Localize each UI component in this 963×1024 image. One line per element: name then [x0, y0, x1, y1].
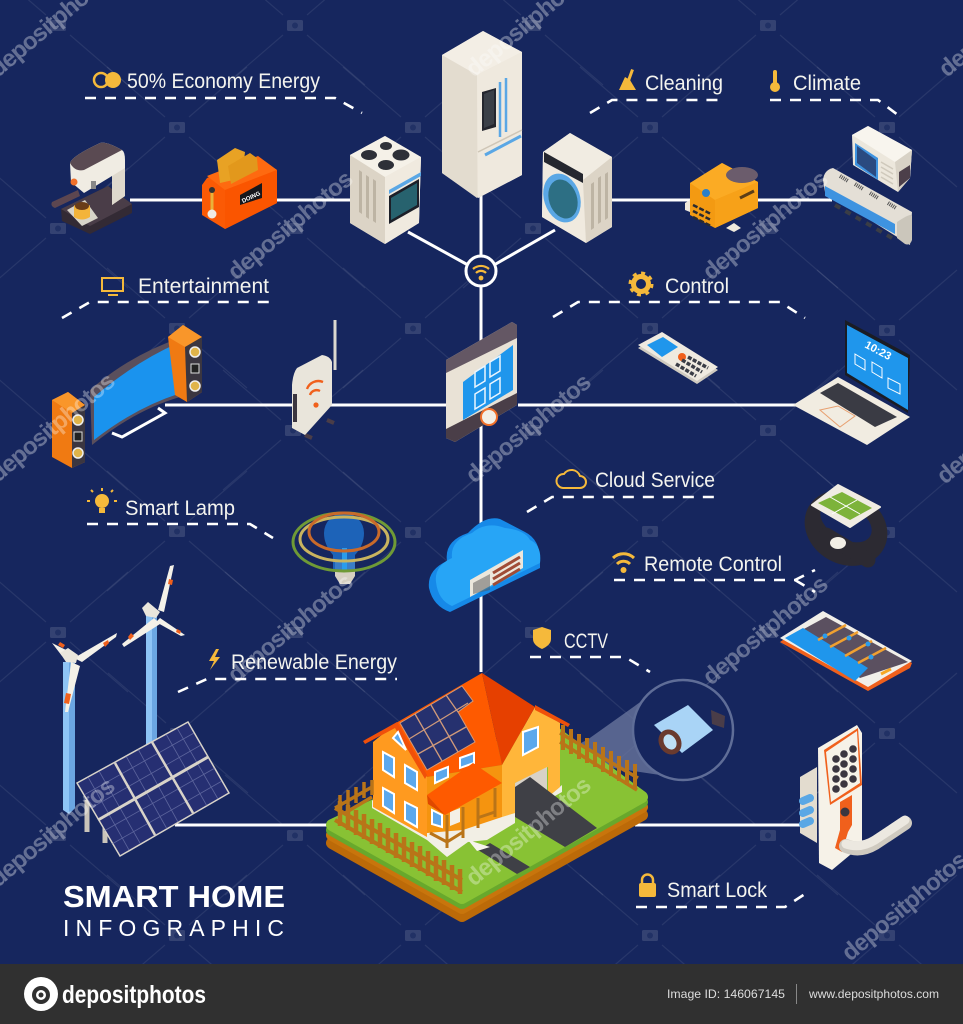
heading: label Control	[553, 273, 805, 318]
icon: tablet hub	[446, 322, 517, 442]
stock watermark: depositphotos	[461, 368, 597, 489]
icon: laptop	[793, 320, 910, 445]
connection lines	[130, 195, 832, 825]
icon: smart watch	[791, 475, 901, 581]
icon: wifi hub node	[466, 256, 496, 286]
heading: label Entertainment	[62, 275, 275, 318]
icon: coins	[94, 72, 121, 88]
icon: cloud outline	[556, 470, 586, 488]
icon: TV	[90, 338, 180, 445]
title	[63, 879, 285, 941]
heading: label Climate: Climate	[793, 72, 861, 95]
icon: indoor AC unit	[823, 168, 912, 245]
heading: label Control: Control	[665, 275, 729, 298]
icon: solar panel	[77, 722, 229, 856]
heading: label Remote Control	[613, 553, 815, 592]
icon: robot vacuum	[685, 163, 758, 232]
icon: outdoor AC unit	[852, 126, 912, 192]
icon: padlock	[639, 874, 656, 897]
icon: wind turbine large	[122, 565, 185, 745]
icon: shield	[533, 627, 551, 649]
stock watermark: depositphotos	[461, 771, 597, 892]
icon: left speaker	[52, 392, 85, 468]
icon: laptop: 10:23	[863, 339, 893, 363]
heading: label Cloud Service	[527, 469, 718, 512]
icon: thermometer	[770, 70, 780, 92]
icon: gear	[630, 273, 652, 295]
title: SMART HOME	[63, 879, 285, 914]
icon: smart lamp with rings	[293, 513, 395, 584]
stock watermark: depositphotos	[698, 570, 834, 691]
icon: router	[292, 320, 335, 438]
front fence	[335, 801, 462, 894]
house foundation and walls	[372, 707, 562, 857]
icon: remote control	[638, 327, 718, 384]
heading: label Cleaning: Cleaning	[645, 72, 723, 95]
icon: toaster	[202, 148, 277, 229]
heading: label Smart Lamp: Smart Lamp	[125, 497, 235, 520]
heading: label Cloud Service: Cloud Service	[595, 469, 715, 492]
footer bar	[0, 964, 963, 1024]
icon: cloud with server	[429, 518, 540, 612]
heading: label Smart Lock: Smart Lock	[667, 879, 767, 902]
icon: wifi	[613, 554, 634, 573]
icon: oven	[350, 136, 421, 244]
footer bar: www.depositphotos.com	[808, 987, 939, 1001]
side fence	[335, 780, 372, 813]
icon: coffee machine	[51, 143, 132, 234]
roof	[363, 673, 570, 779]
stock watermark: depositphotos	[223, 165, 359, 286]
heading: label Renewable Energy	[178, 649, 397, 692]
back fence	[560, 725, 638, 790]
heading: label 50% Economy Energy	[85, 70, 362, 113]
heading: label Smart Lamp	[87, 488, 273, 538]
icon: smartphone	[780, 611, 912, 691]
icon: monitor	[102, 278, 123, 295]
heading: label CCTV	[530, 627, 650, 672]
icon: brush	[619, 69, 636, 90]
icon: house on lawn	[332, 673, 642, 916]
icon: wind turbine small	[52, 633, 117, 814]
heading: label 50% Economy Energy: 50% Economy Energy	[127, 70, 320, 93]
icon: fridge	[442, 31, 522, 198]
icon: washing machine	[537, 133, 612, 243]
heading: label Climate	[770, 70, 902, 118]
solar roof panels	[400, 686, 475, 770]
heading: label Cleaning	[590, 69, 725, 113]
icon: CCTV camera callout	[556, 680, 733, 780]
driveway and path	[468, 767, 597, 874]
stock watermark: depositphotos	[223, 568, 359, 689]
footer bar: Image ID: 146067145	[667, 987, 785, 1001]
icon: right speaker	[168, 325, 202, 402]
heading: label CCTV: CCTV	[564, 630, 608, 653]
heading: label Entertainment: Entertainment	[138, 275, 269, 298]
stock watermark: depositphotos	[698, 165, 834, 286]
icon: smart lock	[800, 725, 905, 870]
icon: lamp	[87, 488, 117, 513]
icon: lightning bolt	[209, 649, 220, 670]
heading: label Renewable Energy: Renewable Energy	[231, 651, 397, 674]
porch	[427, 763, 502, 848]
heading: label Smart Lock	[636, 874, 808, 907]
icon: footer logo	[24, 977, 58, 1011]
heading: label Remote Control: Remote Control	[644, 553, 782, 576]
lawn base	[332, 725, 642, 916]
footer bar: depositphotos	[62, 981, 206, 1009]
icon: toaster: DOING	[241, 191, 262, 205]
title: INFOGRAPHIC	[63, 915, 284, 941]
windows	[383, 727, 538, 827]
